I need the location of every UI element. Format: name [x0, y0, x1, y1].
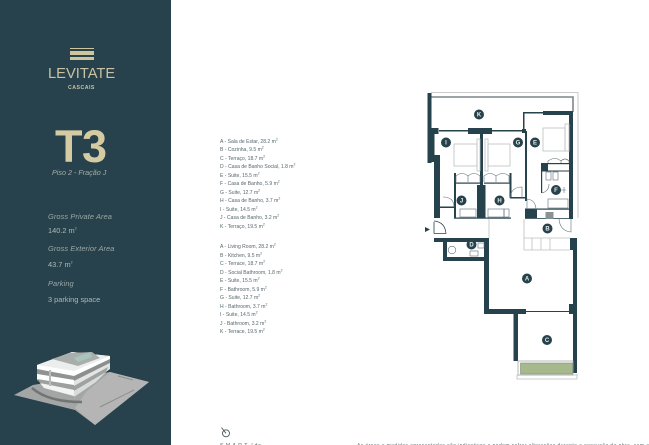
room list: Portuguese: F - Casa de Banho, 5.9 m2	[220, 179, 280, 187]
room list: Portuguese: A - Sala de Estar, 28.2 m2	[220, 137, 278, 144]
label: parking: Parking	[48, 279, 74, 288]
room marker letters: B	[545, 227, 550, 233]
room marker letters: I	[445, 141, 447, 147]
room list: Portuguese: J - Casa de Banho, 3.2 m2	[220, 213, 279, 221]
room marker letters: G	[516, 141, 521, 147]
room list: Portuguese: H - Casa de Banho, 3.7 m2	[220, 196, 280, 204]
room list: English: B - Kitchen, 9.5 m2	[220, 251, 262, 258]
value: parking: 3 parking space	[48, 295, 100, 304]
room list: English: A - Living Room, 28.2 m2	[220, 242, 276, 250]
room list: English: I - Suite, 14.5 m2	[220, 310, 258, 318]
room list: Portuguese: K - Terraço, 19.5 m2	[220, 222, 265, 230]
value: gross private area: 140.2 m2	[48, 226, 77, 235]
room marker letters	[445, 113, 558, 344]
room list: Portuguese: C - Terraço, 18.7 m2	[220, 154, 265, 162]
room list: English: F - Bathroom, 5.9 m2	[220, 285, 267, 292]
room list: Portuguese	[220, 137, 296, 230]
room list: English: C - Terrace, 18.7 m2	[220, 259, 265, 267]
label: gross exterior area: Gross Exterior Area	[48, 244, 115, 253]
beds and light partitions	[454, 124, 570, 250]
room list: English: G - Suite, 12.7 m2	[220, 293, 260, 301]
room list: English: E - Suite, 15.5 m2	[220, 276, 260, 284]
room marker letters: J	[460, 199, 463, 205]
room marker letters: A	[525, 277, 530, 283]
value: gross exterior area: 43.7 m2	[48, 260, 73, 269]
unit type heading: T3	[55, 121, 107, 172]
dark walls	[428, 93, 577, 373]
room list: Portuguese: G - Suite, 12.7 m2	[220, 188, 260, 196]
label: gross private area: Gross Private Area	[48, 212, 112, 221]
room markers	[441, 110, 561, 345]
room list: English: D - Social Bathroom, 1.8 m2	[220, 268, 283, 276]
closets, doors and sanitary fixtures	[443, 158, 571, 256]
icon: north compass	[222, 428, 230, 437]
room marker letters: C	[545, 338, 550, 344]
room list: Portuguese: B - Cozinha, 9.5 m2	[220, 145, 264, 153]
entry door	[434, 221, 446, 234]
logo	[48, 48, 115, 90]
building 3D illustration	[14, 352, 149, 425]
room marker letters: K	[477, 113, 482, 119]
panel: sidebar	[0, 0, 171, 445]
logo wordmark: LEVITATE	[48, 66, 115, 82]
room list: Portuguese: D - Casa de Banho Social, 1.8 m2	[220, 162, 295, 170]
room list: English: H - Bathroom, 3.7 m2	[220, 302, 267, 310]
room marker letters: H	[497, 199, 502, 205]
room list: Portuguese: E - Suite, 15.5 m2	[220, 171, 260, 178]
entry arrow	[425, 227, 430, 232]
logo mark	[70, 48, 94, 60]
kitchen hob	[546, 212, 554, 218]
outer balcony outline	[431, 92, 578, 379]
terrace planter	[518, 361, 573, 375]
room marker letters: E	[533, 141, 537, 147]
room list: Portuguese: I - Suite, 14.5 m2	[220, 205, 258, 212]
room list: English: J - Bathroom, 3.2 m2	[220, 319, 266, 326]
floor and unit: Piso 2 - Fração J	[52, 168, 106, 177]
room marker letters: D	[469, 243, 474, 249]
terrace top rail	[431, 97, 573, 112]
room list: English: K - Terrace, 19.5 m2	[220, 327, 265, 335]
room marker letters: F	[554, 188, 558, 194]
logo subtitle: CASCAIS	[68, 84, 95, 90]
room list: English	[220, 242, 283, 335]
